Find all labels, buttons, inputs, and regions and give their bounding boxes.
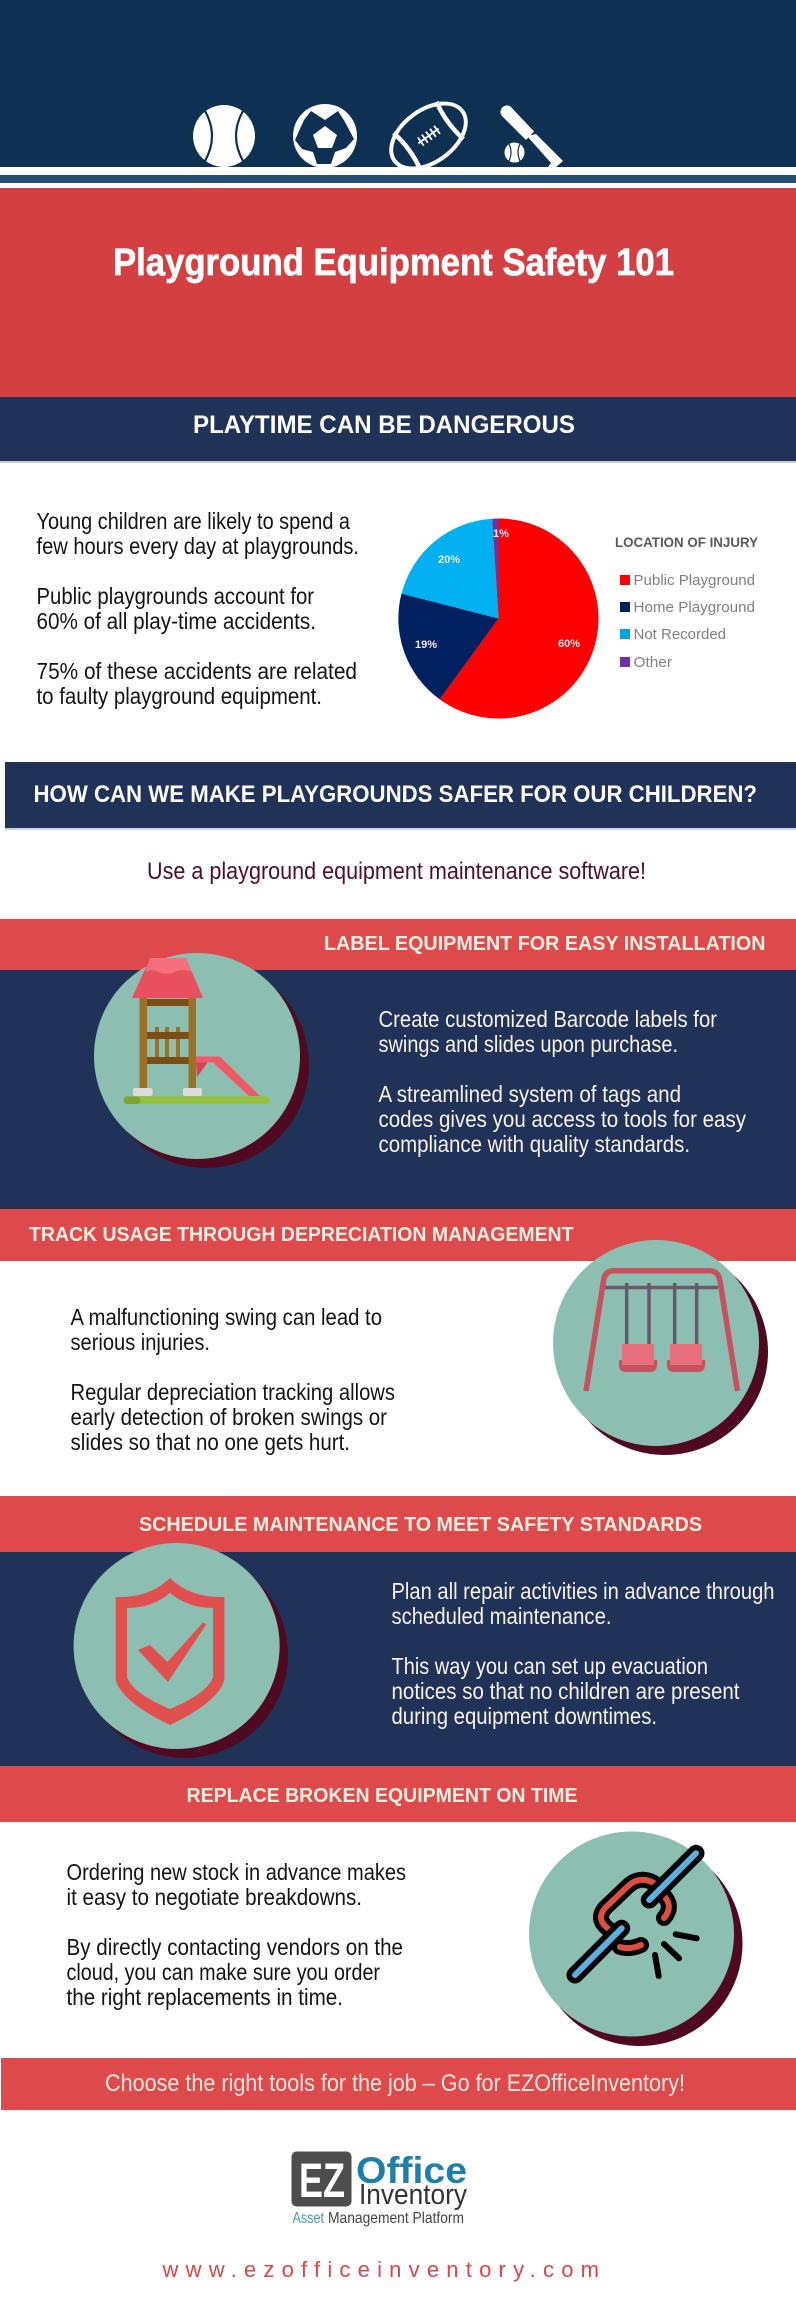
text block: injury facts: to faulty playground equipment.	[36, 683, 322, 709]
text block: A malfunctioning swing can lead to	[70, 1304, 382, 1330]
pie chart: location of injury	[398, 518, 598, 718]
text block: This way you can set up evacuation	[392, 1653, 708, 1679]
logo: EZ Office Inventory: EZ	[299, 2155, 345, 2208]
title: Playground Equipment Safety 101	[113, 242, 674, 284]
text block: A streamlined system of tags and	[378, 1081, 681, 1107]
chart legend: Other	[634, 655, 672, 671]
text block: Regular depreciation tracking allows	[70, 1379, 395, 1405]
chart legend: Home Playground	[634, 600, 755, 616]
text block: the right replacements in time.	[66, 1984, 343, 2010]
text block: it easy to negotiate breakdowns.	[66, 1884, 362, 1910]
pie chart: location of injury: 60%	[558, 638, 580, 650]
pie chart: location of injury: 1%	[493, 528, 509, 540]
text block: injury facts: 75% of these accidents are related	[36, 658, 357, 684]
icon: baseball bat and ball	[500, 105, 563, 167]
icon: swing set in circle	[553, 1240, 768, 1455]
icon: shield with check mark in circle	[74, 1543, 288, 1758]
text block: injury facts: Public playgrounds account for	[36, 583, 314, 609]
heading band: playtime can be dangerous: PLAYTIME CAN BE DANGEROUS	[193, 411, 575, 439]
text block: notices so that no children are present	[392, 1678, 740, 1704]
icon: tennis ball	[193, 105, 255, 167]
header band with sports icons	[0, 0, 796, 183]
text block: injury facts: few hours every day at playgrounds.	[36, 533, 359, 559]
text block: injury facts: 60% of all play-time accidents.	[36, 608, 316, 634]
text block: slides so that no one gets hurt.	[70, 1429, 350, 1455]
logo: EZ Office Inventory: Office	[356, 2150, 467, 2191]
text block: injury facts: Young children are likely to spend a	[36, 508, 351, 534]
text block: early detection of broken swings or	[70, 1404, 387, 1430]
chart legend: Public Playground	[634, 573, 755, 589]
text block: during equipment downtimes.	[392, 1703, 657, 1729]
panel: track usage	[0, 1209, 796, 1455]
panel: schedule maintenance	[0, 1496, 796, 1766]
icon: soccer ball	[293, 104, 357, 168]
text block	[66, 1859, 406, 2010]
section heading: SCHEDULE MAINTENANCE TO MEET SAFETY STANDARDS	[139, 1513, 702, 1536]
chart legend	[615, 535, 758, 671]
text block	[392, 1578, 774, 1729]
text block: injury facts	[36, 508, 359, 709]
section heading: LABEL EQUIPMENT FOR EASY INSTALLATION	[324, 932, 766, 955]
icon: broken chain in circle	[529, 1832, 742, 2046]
chart legend: Not Recorded	[634, 627, 726, 643]
text block: swings and slides upon purchase.	[378, 1031, 678, 1057]
logo: EZ Office Inventory: Inventory	[359, 2179, 467, 2211]
call to action banner: Choose the right tools for the job – Go for EZOfficeInventory!	[105, 2070, 685, 2097]
heading band: playtime can be dangerous	[0, 397, 796, 463]
logo: EZ Office Inventory: Asset	[292, 2210, 324, 2227]
panel: label equipment	[0, 919, 796, 1209]
icon: playground slide in circle	[94, 953, 309, 1168]
text block: codes gives you access to tools for easy	[378, 1106, 746, 1132]
text block: compliance with quality standards.	[378, 1131, 690, 1157]
logo: EZ Office Inventory: Management Platform	[328, 2210, 464, 2227]
chart legend: LOCATION OF INJURY	[615, 535, 758, 550]
section heading: REPLACE BROKEN EQUIPMENT ON TIME	[186, 1784, 578, 1807]
text block	[70, 1304, 395, 1455]
pie chart: location of injury: 19%	[415, 639, 437, 651]
panel: replace broken equipment	[0, 1766, 796, 2046]
text block: Create customized Barcode labels for	[378, 1006, 717, 1032]
hero panel with title	[0, 188, 796, 397]
call to action banner	[1, 2058, 796, 2110]
text block: cloud, you can make sure you order	[66, 1959, 380, 1985]
text block	[378, 1006, 746, 1157]
text block: serious injuries.	[70, 1329, 210, 1355]
text block: Ordering new stock in advance makes	[66, 1859, 406, 1885]
pie chart: location of injury: 20%	[438, 554, 460, 566]
logo: EZ Office Inventory	[292, 2150, 467, 2227]
icon: american football	[379, 90, 478, 182]
text block: scheduled maintenance.	[392, 1603, 612, 1629]
heading band: how can we make playgrounds safer	[5, 762, 796, 830]
website url: www.ezofficeinventory.com	[162, 2257, 599, 2282]
heading band: how can we make playgrounds safer: HOW CAN WE MAKE PLAYGROUNDS SAFER FOR OUR CHILDREN?	[34, 781, 757, 808]
section heading: TRACK USAGE THROUGH DEPRECIATION MANAGEMENT	[29, 1223, 574, 1246]
text block: By directly contacting vendors on the	[66, 1934, 403, 1960]
tagline: Use a playground equipment maintenance software!	[147, 858, 646, 885]
